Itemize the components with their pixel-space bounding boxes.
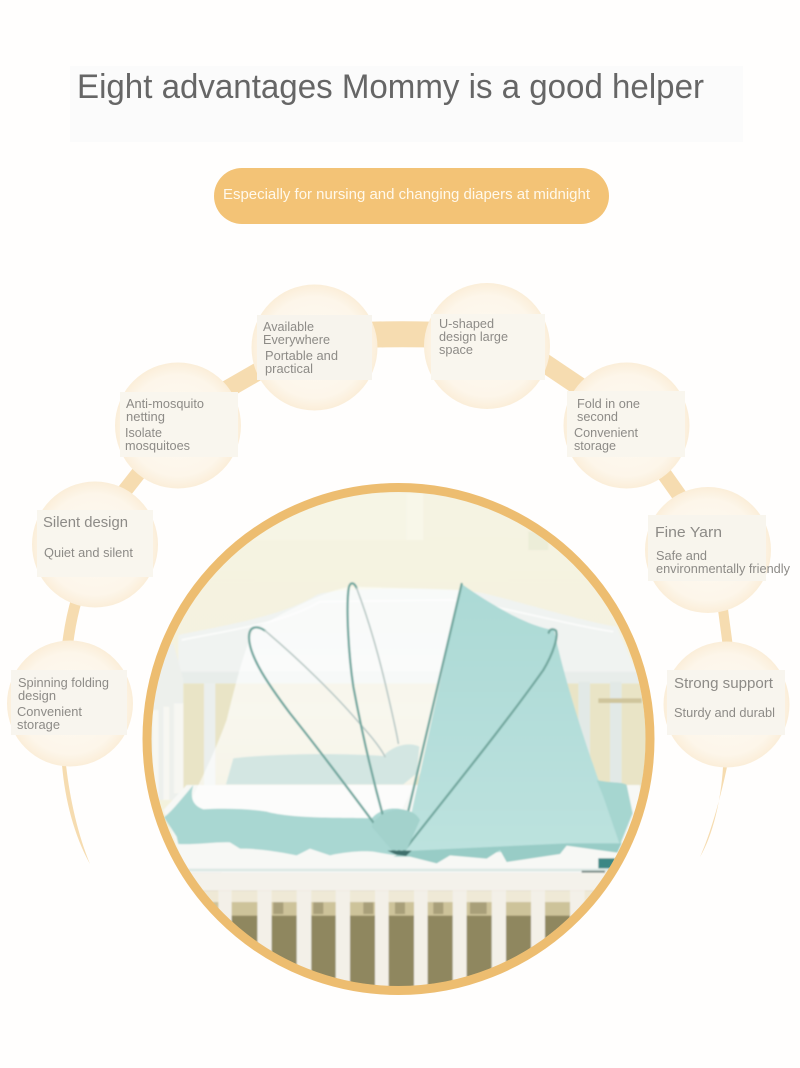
advantage: u-shaped design	[424, 283, 550, 409]
title: Eight advantages Mommy is a good helper	[77, 68, 704, 106]
crib front rail	[183, 873, 620, 891]
advantage: strong support	[664, 642, 790, 768]
advantage: u-shaped design: U-shaped	[439, 316, 494, 331]
advantage: fine yarn: Fine Yarn	[655, 524, 722, 541]
advantage: u-shaped design: design large	[439, 329, 508, 344]
advantage: available everywhere	[252, 284, 378, 410]
crib front slats	[218, 890, 585, 986]
advantage: anti-mosquito netting: netting	[126, 409, 165, 424]
advantage: fine yarn: environmentally friendly	[656, 561, 790, 576]
advantage: spinning folding design: design	[18, 688, 56, 703]
connecting arc	[62, 334, 728, 864]
pillow	[226, 744, 419, 784]
photo ring	[147, 488, 650, 990]
advantage: strong support: Strong support	[674, 675, 774, 692]
net frame arcs	[249, 583, 557, 853]
title	[70, 66, 743, 142]
white net canopy	[198, 586, 457, 786]
advantage: strong support: Sturdy and durabl	[674, 705, 775, 720]
advantage: available everywhere: Portable and	[265, 348, 338, 363]
teal right panel	[403, 584, 622, 853]
crib opening	[204, 890, 593, 986]
advantage: fine yarn	[645, 487, 790, 613]
advantage: anti-mosquito netting: mosquitoes	[125, 438, 190, 453]
advantage: anti-mosquito netting: Anti-mosquito	[126, 396, 204, 411]
advantage: fine yarn: Safe and	[656, 548, 707, 563]
advantage: fold in one second: storage	[574, 438, 616, 453]
advantage: spinning folding design: Convenient	[17, 704, 82, 719]
advantage: u-shaped design: space	[439, 342, 473, 357]
subtitle pill	[214, 168, 609, 224]
advantage: fold in one second	[564, 362, 690, 488]
advantage: anti-mosquito netting: Isolate	[125, 425, 162, 440]
skirt right ruffle	[393, 843, 622, 863]
advantage: fold in one second: Fold in one	[577, 396, 640, 411]
advantage: silent design	[32, 482, 158, 608]
fan base	[372, 810, 420, 850]
skirt left	[164, 785, 422, 855]
advantage: fold in one second: second	[577, 409, 618, 424]
advantage: spinning folding design	[7, 640, 133, 766]
advantage: silent design: Silent design	[43, 514, 128, 531]
advantage: anti-mosquito netting	[115, 362, 241, 488]
subtitle pill: Especially for nursing and changing diapers at midnight	[223, 186, 591, 203]
skirt right	[597, 780, 633, 845]
advantage: spinning folding design: storage	[17, 717, 60, 732]
advantage: available everywhere: Available	[263, 319, 314, 334]
advantage: fold in one second: Convenient	[574, 425, 638, 440]
fan hub	[387, 851, 412, 856]
advantage: spinning folding design: Spinning folding	[18, 675, 109, 690]
advantage: available everywhere: practical	[265, 361, 313, 376]
advantage: silent design: Quiet and silent	[44, 545, 133, 560]
mattress	[163, 785, 650, 873]
advantage: available everywhere: Everywhere	[263, 332, 330, 347]
central photo: foldable mosquito net on crib	[140, 480, 660, 1001]
